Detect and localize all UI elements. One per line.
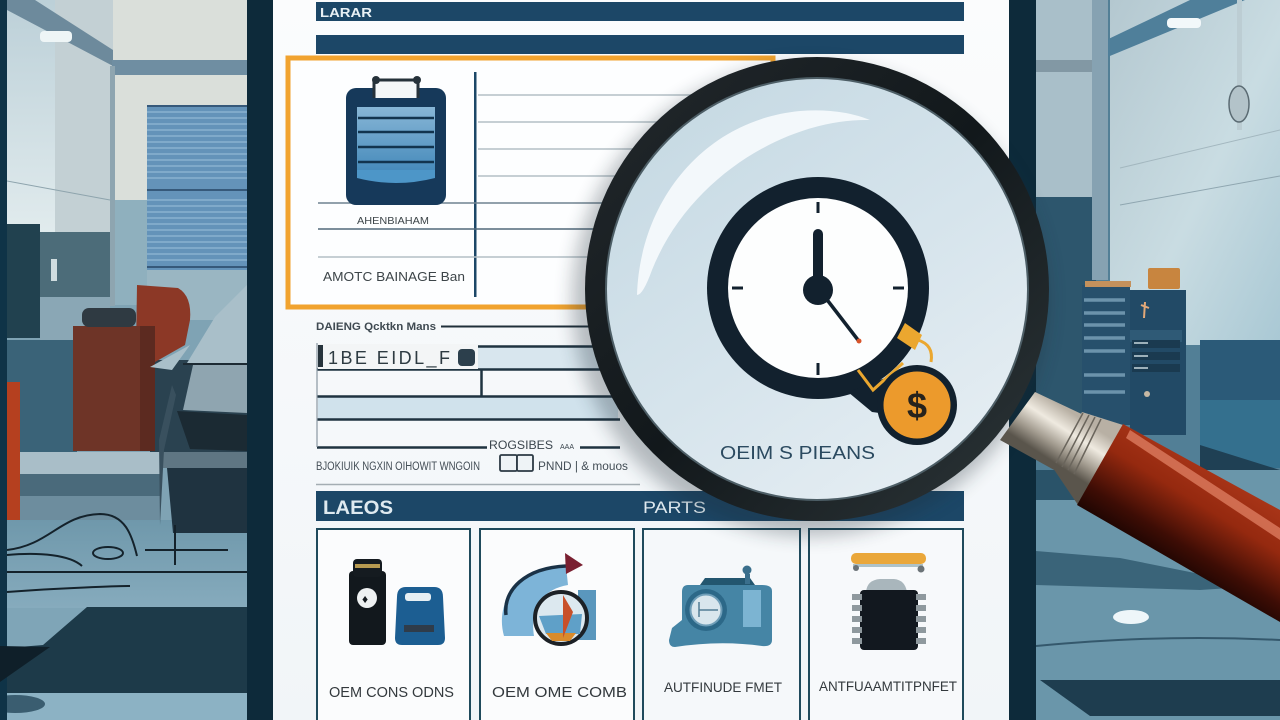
roller shutter door xyxy=(147,105,247,270)
magnifier handle xyxy=(1000,392,1280,622)
lens caption: OEIM S PIEANS xyxy=(720,443,875,463)
garage background: left side xyxy=(0,0,247,720)
form note: ROGSIBES xyxy=(489,438,553,452)
card 2 label: OEM OME COMB xyxy=(492,684,627,701)
document paper xyxy=(273,0,1009,720)
red equipment xyxy=(7,285,190,540)
section bar: labor and parts xyxy=(316,491,964,521)
magnifier lens xyxy=(607,79,1027,499)
coin xyxy=(877,365,957,445)
vertical divider xyxy=(474,72,476,297)
far-left dark edge xyxy=(0,0,7,720)
lens highlight xyxy=(637,110,870,295)
estimate form xyxy=(316,321,640,484)
icon: part device xyxy=(669,566,772,647)
part card 4: aftermarket chip xyxy=(809,529,963,720)
checkboxes xyxy=(500,455,533,471)
part card 1: OEM xyxy=(317,529,470,720)
second header bar xyxy=(316,35,964,54)
tool cabinet xyxy=(1082,268,1186,435)
estimate form: AAA xyxy=(560,444,574,451)
floor cables xyxy=(7,514,247,592)
magnifier ring xyxy=(585,57,1049,521)
ruled lines xyxy=(318,95,760,257)
icon: wheel with arrow xyxy=(502,553,596,644)
clock xyxy=(707,177,957,445)
icon: clipboard xyxy=(346,76,446,205)
part card 2: OEM alternative xyxy=(480,529,634,720)
highlighted panel: labor estimate xyxy=(288,58,773,307)
icon: chip part xyxy=(851,553,926,650)
panel label: AHENBIAHAM xyxy=(357,215,429,227)
form reference field xyxy=(318,344,478,369)
coin: $ xyxy=(907,385,927,426)
car xyxy=(150,285,247,533)
form reference field: 1BE EIDL_F xyxy=(328,348,450,369)
card 1 label: OEM CONS ODNS xyxy=(329,684,454,701)
section bar: labor and parts: LAEOS xyxy=(323,498,393,519)
header bar: labor xyxy=(316,2,964,21)
form heading: DAIENG Qcktkn Mans xyxy=(316,321,436,333)
card 3 label: AUTFINUDE FMET xyxy=(664,680,782,695)
card 4 label: ANTFUAAMTITPNFET xyxy=(819,679,957,694)
panel total label: AMOTC BAINAGE Ban xyxy=(323,269,465,284)
magnifying glass xyxy=(585,57,1280,622)
form caption: BJOKIUIK NGXIN OIHOWIT WNGOIN xyxy=(316,461,480,473)
clock band xyxy=(897,323,922,350)
checkbox caption: PNND | & mouos xyxy=(538,461,628,473)
part card 3: aftermarket xyxy=(643,529,800,720)
garage background: right side xyxy=(1036,0,1280,720)
document frame xyxy=(247,0,1036,720)
icon: OEM parts xyxy=(349,559,445,645)
header bar: labor: LARAR xyxy=(320,5,373,20)
magnifier shadow on the document xyxy=(572,64,1048,536)
section bar: labor and parts: PARTS xyxy=(643,498,706,517)
icon: OEM parts: ♦ xyxy=(362,592,368,606)
